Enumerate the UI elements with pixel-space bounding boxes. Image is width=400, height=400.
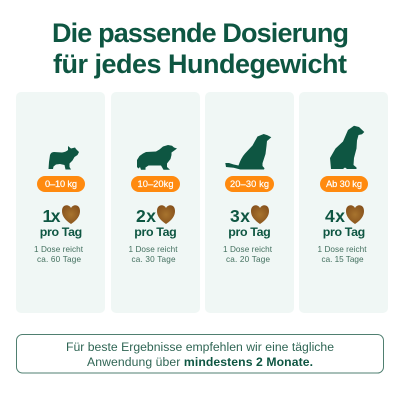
weight badge <box>225 176 274 192</box>
dose <box>134 205 177 239</box>
dose: pro Tag <box>228 225 271 239</box>
dose: pro Tag <box>323 225 365 239</box>
callout: Für beste Ergebnisse empfehlen wir eine tägliche <box>66 340 334 354</box>
title <box>52 18 349 79</box>
panel: 10–20 kg <box>111 92 200 313</box>
duration: ca. 15 Tage <box>322 255 364 264</box>
icon: small dog <box>48 146 79 170</box>
weight badge: 10–20kg <box>138 179 174 189</box>
dose: 2x <box>136 206 156 226</box>
icon: medium dog <box>137 145 177 170</box>
title: Die passende Dosierung <box>52 18 349 48</box>
duration: 1 Dose reicht <box>223 245 273 254</box>
dose: 3x <box>230 206 250 226</box>
weight badge: 0–10 kg <box>45 179 77 189</box>
dose: 1x <box>42 206 61 226</box>
icon: large dog <box>225 134 271 170</box>
duration <box>223 245 273 264</box>
dose: pro Tag <box>134 225 177 239</box>
weight badge <box>131 176 180 192</box>
panel: 0–10 kg <box>16 92 105 313</box>
callout <box>16 334 384 373</box>
weight badge: 20–30 kg <box>230 179 269 189</box>
callout: Anwendung über mindestens 2 Monate. <box>87 355 313 369</box>
duration: ca. 60 Tage <box>37 255 81 264</box>
dose: pro Tag <box>40 225 82 239</box>
duration <box>34 245 84 264</box>
duration: ca. 20 Tage <box>226 255 270 264</box>
icon: giant dog <box>330 126 364 169</box>
duration: 1 Dose reicht <box>128 245 178 254</box>
dose <box>228 205 271 239</box>
duration <box>128 245 178 264</box>
duration: ca. 30 Tage <box>132 255 176 264</box>
panel: 20–30 kg <box>205 92 294 313</box>
title: für jedes Hundegewicht <box>53 49 347 79</box>
duration <box>318 245 367 264</box>
duration: 1 Dose reicht <box>34 245 84 254</box>
weight badge: Ab 30 kg <box>326 179 362 189</box>
panel: ab 30 kg <box>299 92 388 313</box>
weight badge <box>320 176 368 192</box>
weight badge <box>37 176 85 192</box>
dose <box>323 205 365 239</box>
dose: 4x <box>325 206 345 226</box>
duration: 1 Dose reicht <box>318 245 367 254</box>
dose <box>40 205 82 239</box>
